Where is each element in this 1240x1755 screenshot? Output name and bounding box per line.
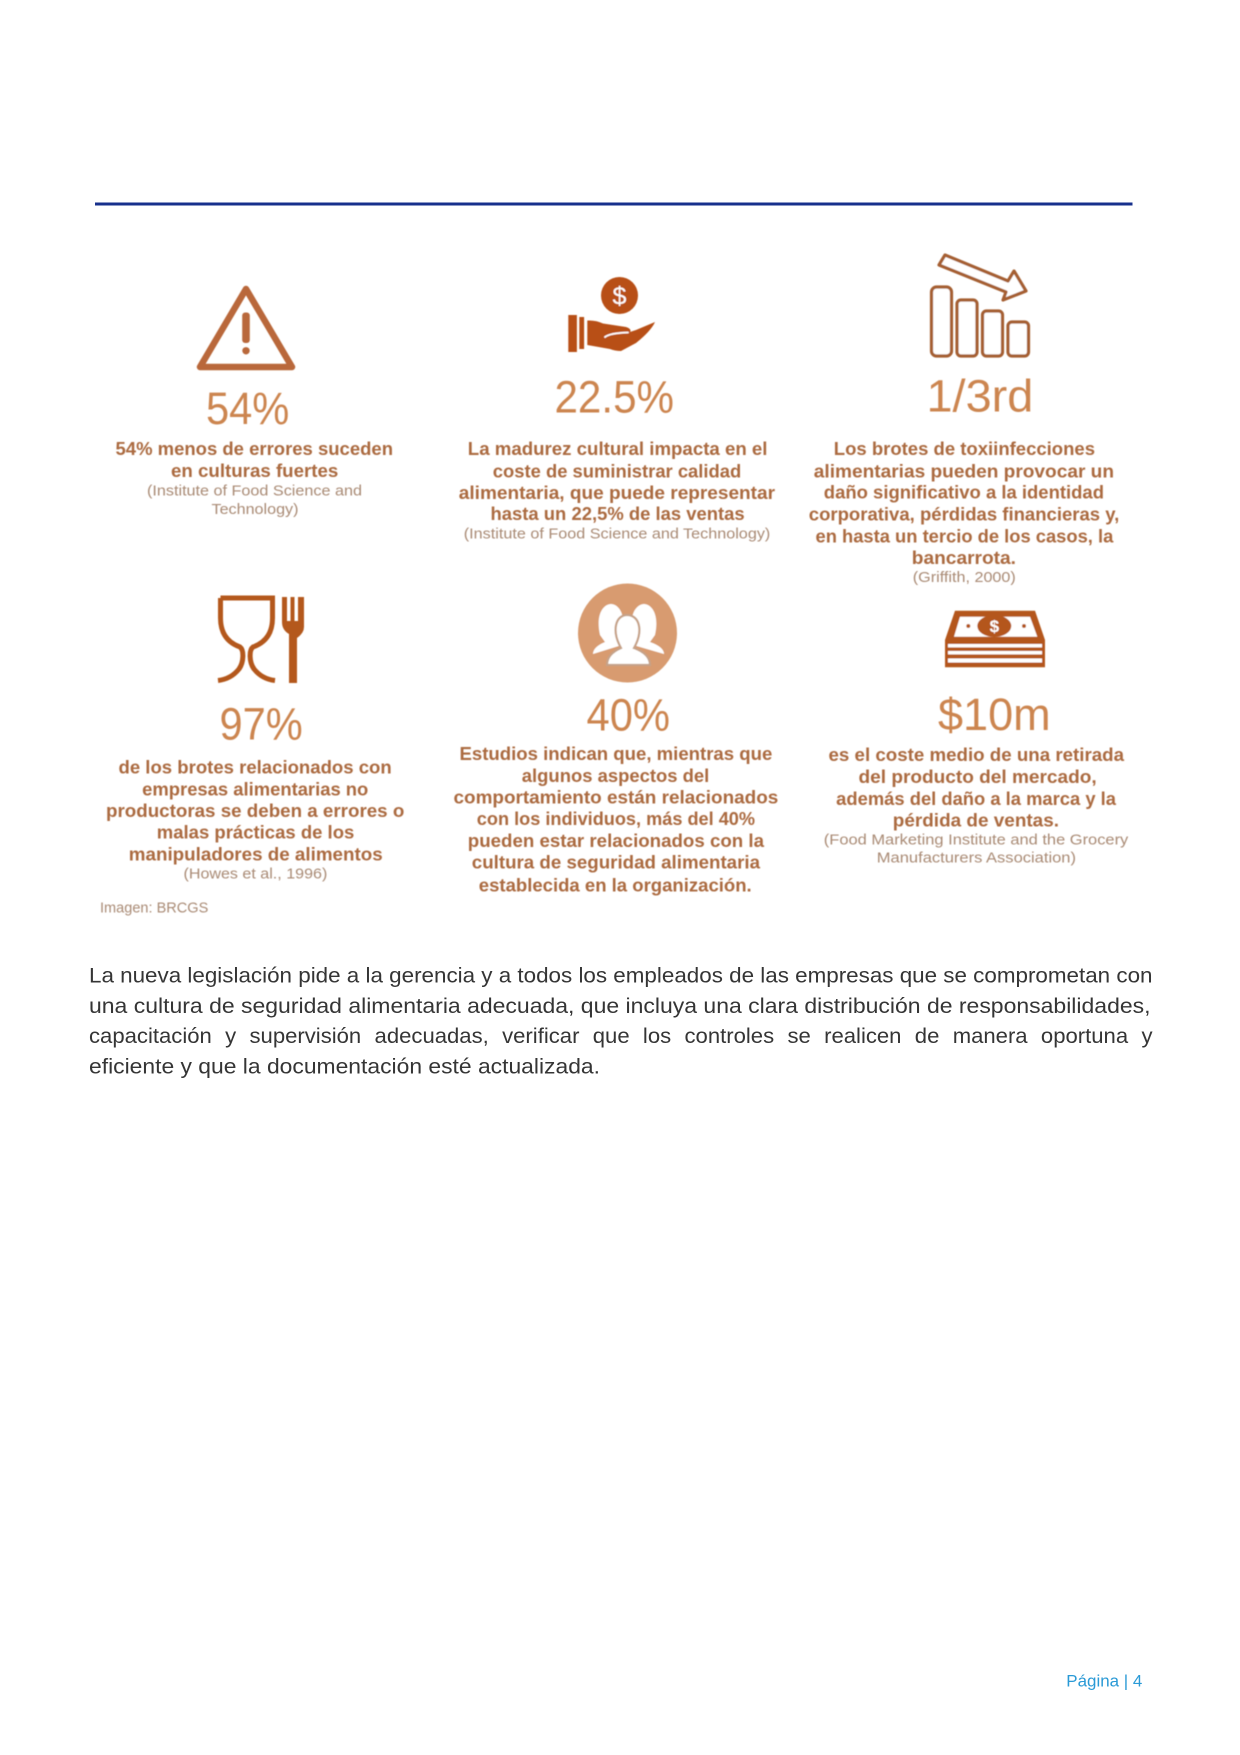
body paragraph: eficiente y que la documentación esté actualizada.: [89, 1054, 600, 1078]
text: description: alimentarias pueden provocar un: [814, 461, 1114, 481]
icon: stack of banknotes: [945, 611, 1045, 667]
text: source: (Griffith, 2000): [913, 569, 1016, 586]
text: source: Technology): [212, 501, 298, 518]
number: 54%: 54%: [206, 383, 289, 434]
text: description: bancarrota.: [912, 548, 1016, 568]
text: description: pueden estar relacionados con la: [468, 831, 765, 851]
icon: falling bars with arrow: [932, 255, 1028, 356]
number: 97%: 97%: [220, 698, 303, 749]
text: description: [809, 439, 1119, 568]
body paragraph: capacitación y supervisión adecuadas, verificar que los controles se realicen de manera oportuna y: [89, 1024, 1153, 1048]
text: source: (Howes et al., 1996): [184, 865, 327, 882]
body paragraph: [89, 963, 1153, 1078]
text: description: es el coste medio de una retirada: [828, 745, 1125, 765]
text: description: cultura de seguridad alimentaria: [472, 852, 761, 872]
text: source: (Institute of Food Science and: [147, 483, 362, 500]
body paragraph: La nueva legislación pide a la gerencia y a todos los empleados de las empresas que se comprometan con: [89, 963, 1152, 987]
text: description: coste de suministrar calidad: [493, 462, 741, 482]
text: description: corporativa, pérdidas financieras y,: [809, 505, 1119, 525]
text: description: con los individuos, más del 40%: [477, 809, 755, 829]
text: description: Los brotes de toxiinfecciones: [834, 439, 1095, 459]
text: description: de los brotes relacionados con: [118, 757, 392, 777]
header rule: [95, 202, 1132, 206]
icon: stack of banknotes: $: [990, 617, 1000, 636]
number: 22.5%: 22.5%: [554, 372, 674, 423]
icon: glass and fork: [218, 597, 304, 683]
text: source: [824, 832, 1129, 866]
panel: 54%: [116, 289, 393, 518]
panel: 40%: [454, 584, 778, 895]
text: description: en culturas fuertes: [171, 461, 338, 481]
text: description: establecida en la organización.: [479, 875, 752, 895]
text: description: [106, 757, 404, 865]
number: 1/3rd: 1/3rd: [926, 371, 1033, 422]
icon: hand with coin: [568, 277, 655, 352]
number: $10m: $10m: [938, 689, 1051, 740]
body paragraph: una cultura de seguridad alimentaria adecuada, que incluya una clara distribución de responsabilidades,: [89, 994, 1150, 1018]
text: source: (Food Marketing Institute and the Grocery: [824, 832, 1129, 849]
text: source: [147, 483, 362, 518]
text: description: hasta un 22,5% de las ventas: [490, 504, 745, 524]
text: description: La madurez cultural impacta en el: [468, 439, 768, 459]
icon: hand with coin: $: [613, 282, 627, 310]
text: description: malas prácticas de los: [157, 822, 354, 842]
text: description: [459, 439, 775, 524]
panel: $10m: [824, 611, 1129, 866]
infographic image: [100, 255, 1129, 916]
text: description: comportamiento están relacionados: [454, 787, 778, 807]
text: source: Manufacturers Association): [877, 850, 1076, 866]
page number: Página | 4: [1066, 1672, 1142, 1690]
panel: 1/3rd: [809, 255, 1119, 586]
text: description: además del daño a la marca y la: [836, 789, 1117, 809]
panel: 22.5%: [459, 277, 775, 542]
text: description: alimentaria, que puede representar: [459, 483, 775, 503]
icon: warning triangle: [200, 289, 292, 367]
text: description: pérdida de ventas.: [893, 811, 1059, 831]
panel: 97%: [100, 597, 404, 916]
number: 40%: 40%: [586, 690, 670, 740]
text: description: manipuladores de alimentos: [129, 845, 383, 865]
icon: people in circle: [578, 584, 677, 682]
text: description: en hasta un tercio de los casos, la: [816, 526, 1114, 546]
text: description: [828, 745, 1125, 831]
text: description: [116, 439, 393, 481]
text: description: del producto del mercado,: [858, 767, 1097, 787]
text: description: 54% menos de errores suceden: [116, 439, 393, 459]
text: description: daño significativo a la identidad: [824, 482, 1104, 502]
text: description: algunos aspectos del: [522, 766, 709, 786]
text: description: productoras se deben a errores o: [106, 801, 404, 821]
text: source: (Institute of Food Science and Technology): [464, 525, 770, 542]
text: description: empresas alimentarias no: [142, 780, 368, 800]
text: description: Estudios indican que, mientras que: [460, 744, 772, 764]
text: description: [454, 744, 778, 895]
text: image credit: Imagen: BRCGS: [100, 900, 208, 916]
